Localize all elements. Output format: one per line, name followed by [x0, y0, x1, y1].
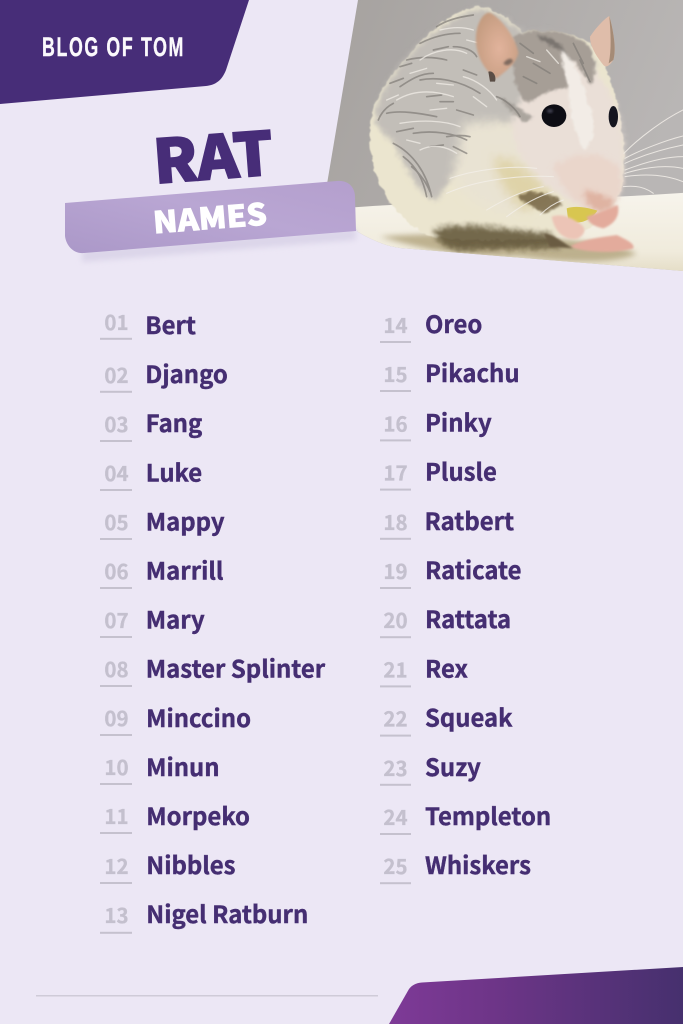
name 20: Rattata [425, 600, 511, 635]
name 06: 06 [104, 555, 129, 585]
name 25 [380, 846, 531, 884]
name 02: 02 [104, 359, 129, 389]
name 03 [100, 404, 202, 442]
name 07 [100, 601, 205, 638]
subtitle banner: names [65, 181, 356, 262]
name 25: 25 [383, 850, 408, 880]
name 17: Plusle [425, 453, 497, 488]
body [370, 7, 624, 240]
name 03: 03 [104, 408, 129, 438]
name 15: 15 [383, 358, 408, 388]
name 19: Raticate [425, 551, 522, 586]
head grey cap [512, 30, 595, 103]
name 01: Bert [145, 306, 196, 341]
name 05: Mappy [146, 502, 225, 537]
name 09: 09 [104, 702, 129, 732]
name 21: 21 [383, 653, 408, 683]
eyes [542, 104, 566, 127]
name 21: Rex [425, 649, 469, 684]
name 23: 23 [383, 752, 408, 782]
name 03: Fang [146, 404, 202, 439]
name 10 [100, 748, 220, 785]
names list: right column [380, 305, 551, 884]
name 16 [380, 403, 492, 441]
left ear [476, 13, 518, 78]
name 07: 07 [104, 604, 129, 634]
name 24: 24 [383, 801, 408, 831]
name 19: 19 [383, 555, 408, 585]
fur streaks [378, 15, 590, 197]
names list: left column [100, 306, 326, 934]
muzzle [554, 155, 624, 205]
header tab [0, 0, 249, 104]
name 15: Pikachu [425, 354, 520, 389]
name 12: Nibbles [146, 846, 236, 881]
name 19 [380, 551, 522, 589]
name 07: Mary [146, 601, 205, 636]
name 09 [100, 699, 251, 736]
name 25: Whiskers [425, 846, 531, 881]
photo: rat eating [313, 0, 683, 277]
name 23: Suzy [425, 748, 481, 783]
name 01: 01 [104, 306, 129, 336]
name 11 [100, 797, 250, 834]
name 05 [100, 502, 225, 540]
name 08: 08 [104, 653, 129, 683]
name 21 [380, 649, 469, 687]
name 06: Marrill [146, 552, 223, 586]
name 08: Master Splinter [146, 650, 326, 685]
name 10: 10 [104, 751, 129, 781]
name 16: 16 [383, 408, 408, 438]
name 24 [380, 797, 551, 835]
name 09: Minccino [146, 699, 251, 734]
name 01 [100, 306, 196, 341]
name 10: Minun [146, 748, 220, 783]
name 11: Morpeko [146, 797, 250, 832]
name 22 [380, 699, 513, 737]
name 18 [380, 502, 514, 540]
name 13: 13 [104, 899, 129, 929]
name 24: Templeton [425, 797, 551, 832]
name 02 [100, 355, 228, 393]
name 18: Ratbert [424, 502, 514, 537]
name 20: 20 [383, 604, 408, 634]
name 14 [380, 305, 482, 343]
name 12 [100, 846, 236, 884]
name 13: Nigel Ratburn [146, 895, 308, 930]
name 20 [380, 600, 511, 638]
name 05: 05 [104, 506, 129, 536]
whiskers [447, 110, 683, 217]
name 04: Luke [146, 453, 202, 488]
name 15 [380, 354, 520, 392]
name 12: 12 [104, 850, 129, 880]
name 17 [380, 453, 497, 491]
brand: blog of tom: BLOG OF TOM [42, 32, 185, 62]
name 16: Pinky [425, 403, 492, 438]
name 14: Oreo [425, 305, 482, 340]
name 04 [100, 453, 202, 491]
name 23 [380, 748, 481, 786]
name 14: 14 [383, 309, 408, 339]
right ear [590, 16, 615, 66]
title: rat: RAT [150, 106, 276, 201]
name 22: 22 [383, 703, 408, 733]
name 18: 18 [383, 506, 408, 536]
footer tab [389, 967, 683, 1024]
head [512, 60, 624, 211]
name 02: Django [145, 355, 228, 390]
subtitle banner: names: NAMES [151, 190, 268, 242]
name 04: 04 [104, 457, 129, 487]
name 17: 17 [383, 457, 408, 487]
food, hands and foot [567, 207, 597, 223]
name 06 [100, 552, 223, 589]
name 11: 11 [104, 800, 129, 830]
name 22: Squeak [425, 699, 513, 734]
